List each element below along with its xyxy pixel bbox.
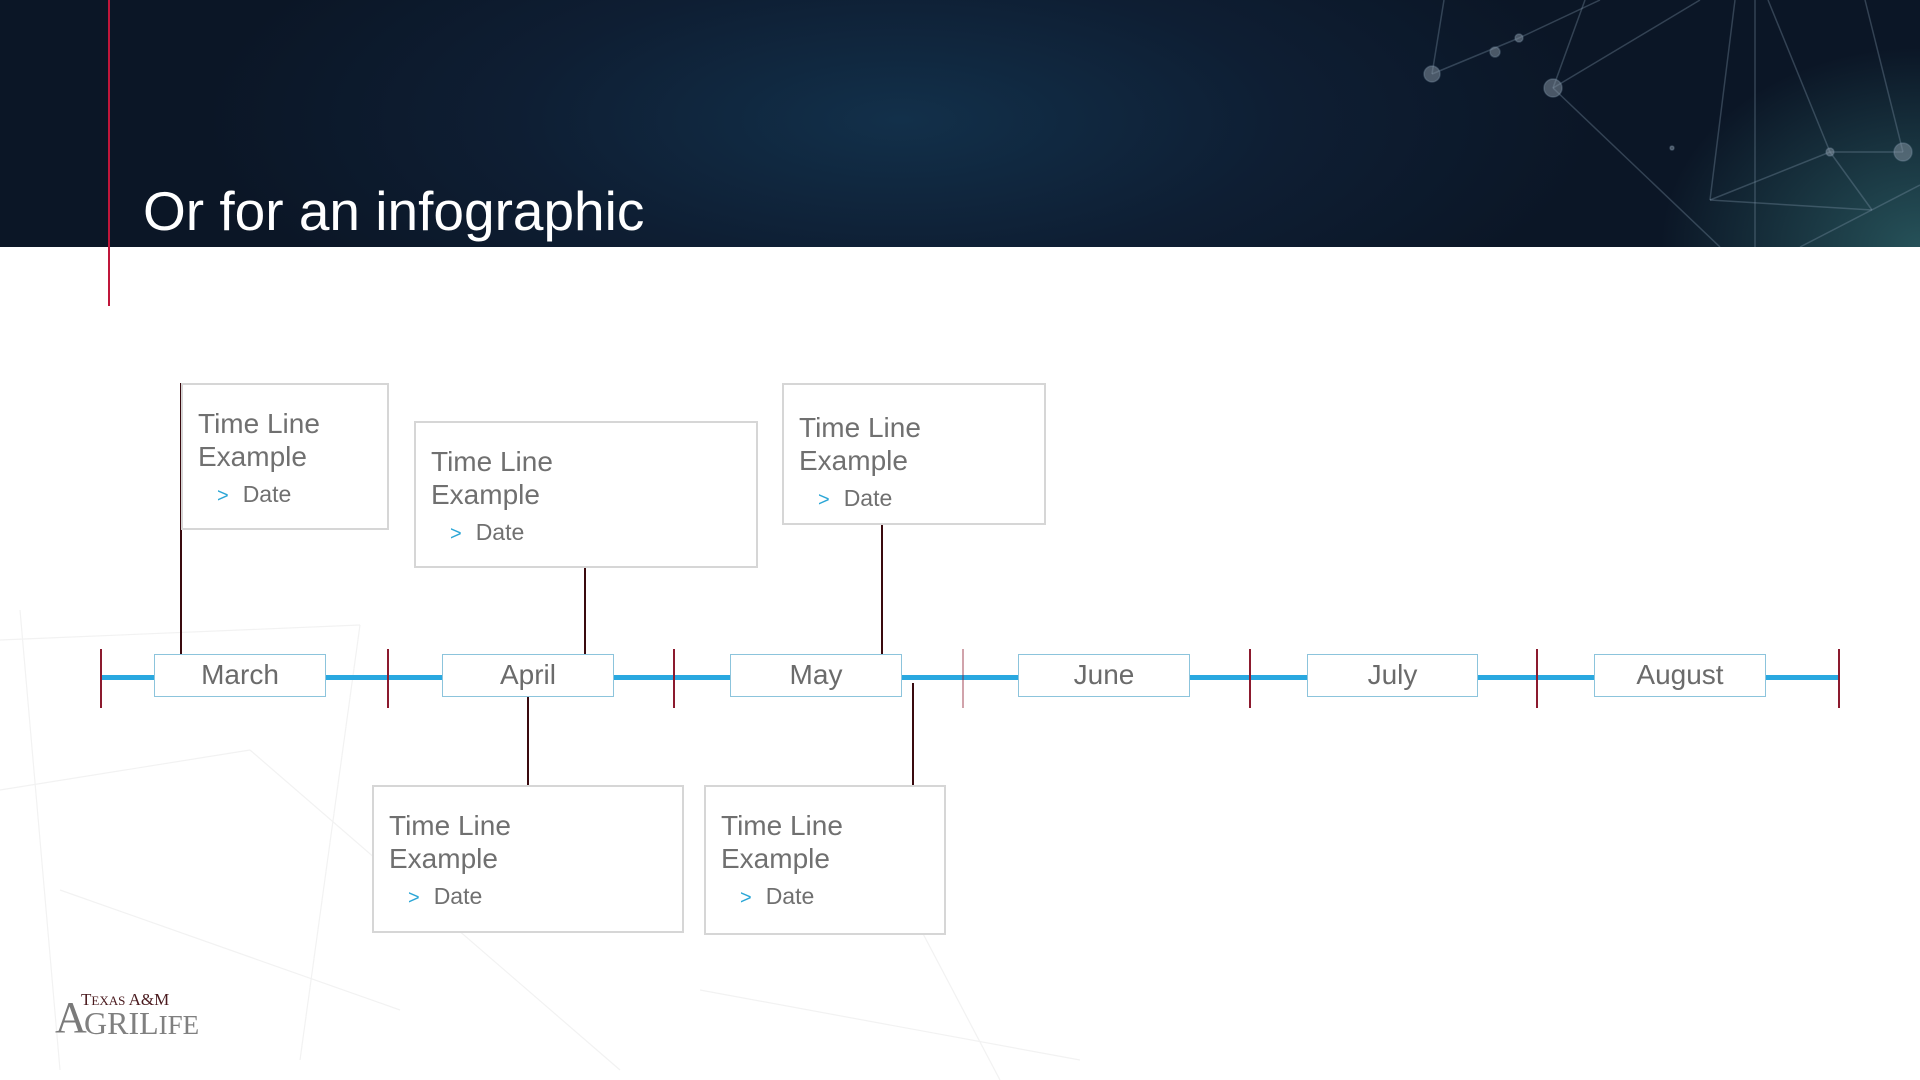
card 1: Example	[198, 441, 307, 472]
month: March: March	[201, 659, 279, 690]
card 4: Time Line	[389, 810, 511, 841]
network decoration	[1423, 0, 1920, 247]
month: May	[730, 654, 902, 697]
logo: Texas A&M AgriLife	[55, 990, 199, 1042]
month: April	[442, 654, 614, 697]
month: April: April	[500, 659, 556, 690]
month: August	[1594, 654, 1766, 697]
card 2	[414, 421, 758, 568]
card 5: Time Line	[721, 810, 843, 841]
logo: Texas A&M AgriLife: A	[55, 993, 87, 1042]
month: March	[154, 654, 326, 697]
month: June	[1018, 654, 1190, 697]
tick marks	[100, 649, 1840, 708]
card 3	[782, 383, 1046, 525]
card 2: Example	[431, 479, 540, 510]
card 5	[704, 785, 946, 935]
month: July: July	[1368, 659, 1417, 690]
connector lines	[180, 383, 914, 785]
logo: Texas A&M AgriLife: GRILIFE	[84, 1005, 199, 1041]
card 1	[181, 383, 389, 530]
card 5: > Date	[740, 883, 814, 909]
card 2: Time Line	[431, 446, 553, 477]
header band	[0, 0, 1920, 247]
timeline axis	[100, 675, 1840, 680]
card 1: > Date	[217, 481, 291, 507]
card 1: Time Line	[198, 408, 320, 439]
card 3: > Date	[818, 485, 892, 511]
month: July	[1307, 654, 1478, 697]
card 4	[372, 785, 684, 933]
faint background network	[0, 610, 1080, 1080]
card 4: > Date	[408, 883, 482, 909]
accent red vertical line	[108, 0, 110, 306]
title: Or for an infographic	[143, 180, 644, 242]
card 2: > Date	[450, 519, 524, 545]
card 3: Time Line	[799, 412, 921, 443]
month: August: August	[1636, 659, 1724, 690]
card 5: Example	[721, 843, 830, 874]
month: June: June	[1074, 659, 1134, 690]
month: May: May	[790, 659, 842, 690]
card 3: Example	[799, 445, 908, 476]
logo: Texas A&M AgriLife: TEXAS A&M	[81, 990, 169, 1009]
card 4: Example	[389, 843, 498, 874]
